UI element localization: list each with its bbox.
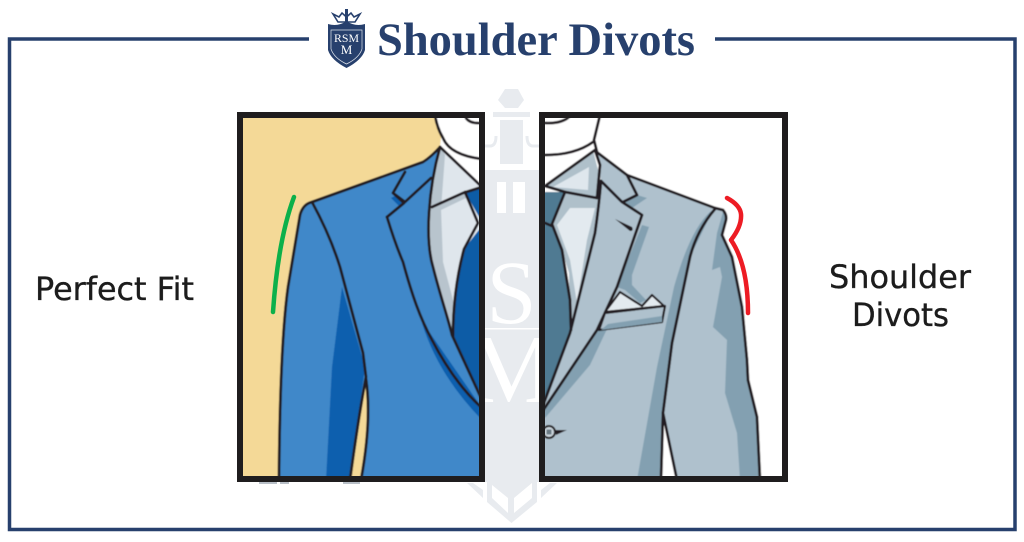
- panel frame: [240, 115, 482, 479]
- title: Shoulder Divots: [377, 14, 695, 66]
- lapel shadow: [391, 196, 482, 420]
- panel frame: [542, 115, 785, 479]
- seam shadow: [637, 210, 713, 480]
- sleeve shadow: [326, 287, 365, 480]
- red divot line: [727, 198, 748, 313]
- neck and white shirt area: [436, 118, 479, 184]
- label: shoulder divots: [829, 258, 972, 334]
- jacket body: [279, 147, 482, 480]
- label: shoulder divots: Divots: [852, 296, 949, 334]
- watermark: light grey crest behind panels: [259, 89, 557, 523]
- panel: shoulder divots illustration: [542, 115, 785, 480]
- shirt collar: [548, 152, 600, 197]
- shirt collar and shirt front: [440, 152, 479, 302]
- label: shoulder divots: Shoulder: [829, 258, 972, 296]
- jacket body: [545, 154, 740, 476]
- pocket square: [599, 292, 665, 330]
- jacket outlines: [279, 115, 482, 480]
- watermark: light grey crest behind panels: M: [468, 316, 556, 424]
- jacket button: [543, 426, 567, 438]
- logo: crest shield and crown: [328, 9, 365, 68]
- panel: perfect fit illustration: [240, 115, 482, 480]
- white background: [545, 118, 762, 476]
- lapel buttonhole: [615, 219, 633, 231]
- tie: [454, 188, 479, 392]
- shirt front: [552, 192, 598, 319]
- gap between sleeve and body: [351, 387, 368, 476]
- logo: crest shield and crown: M: [341, 42, 353, 57]
- watermark: light grey crest behind panels: S: [486, 244, 537, 343]
- skin-tone background: [243, 118, 442, 476]
- green fit line: [273, 197, 294, 312]
- logo: crest shield and crown: RSM: [334, 31, 359, 45]
- gap between sleeve and body: [662, 425, 676, 476]
- lapel and collar shadows: [542, 195, 649, 418]
- jacket outlines: [542, 115, 760, 480]
- sleeve shadow: [712, 212, 760, 480]
- tie: [545, 191, 570, 398]
- label: perfect fit: Perfect Fit: [35, 270, 194, 308]
